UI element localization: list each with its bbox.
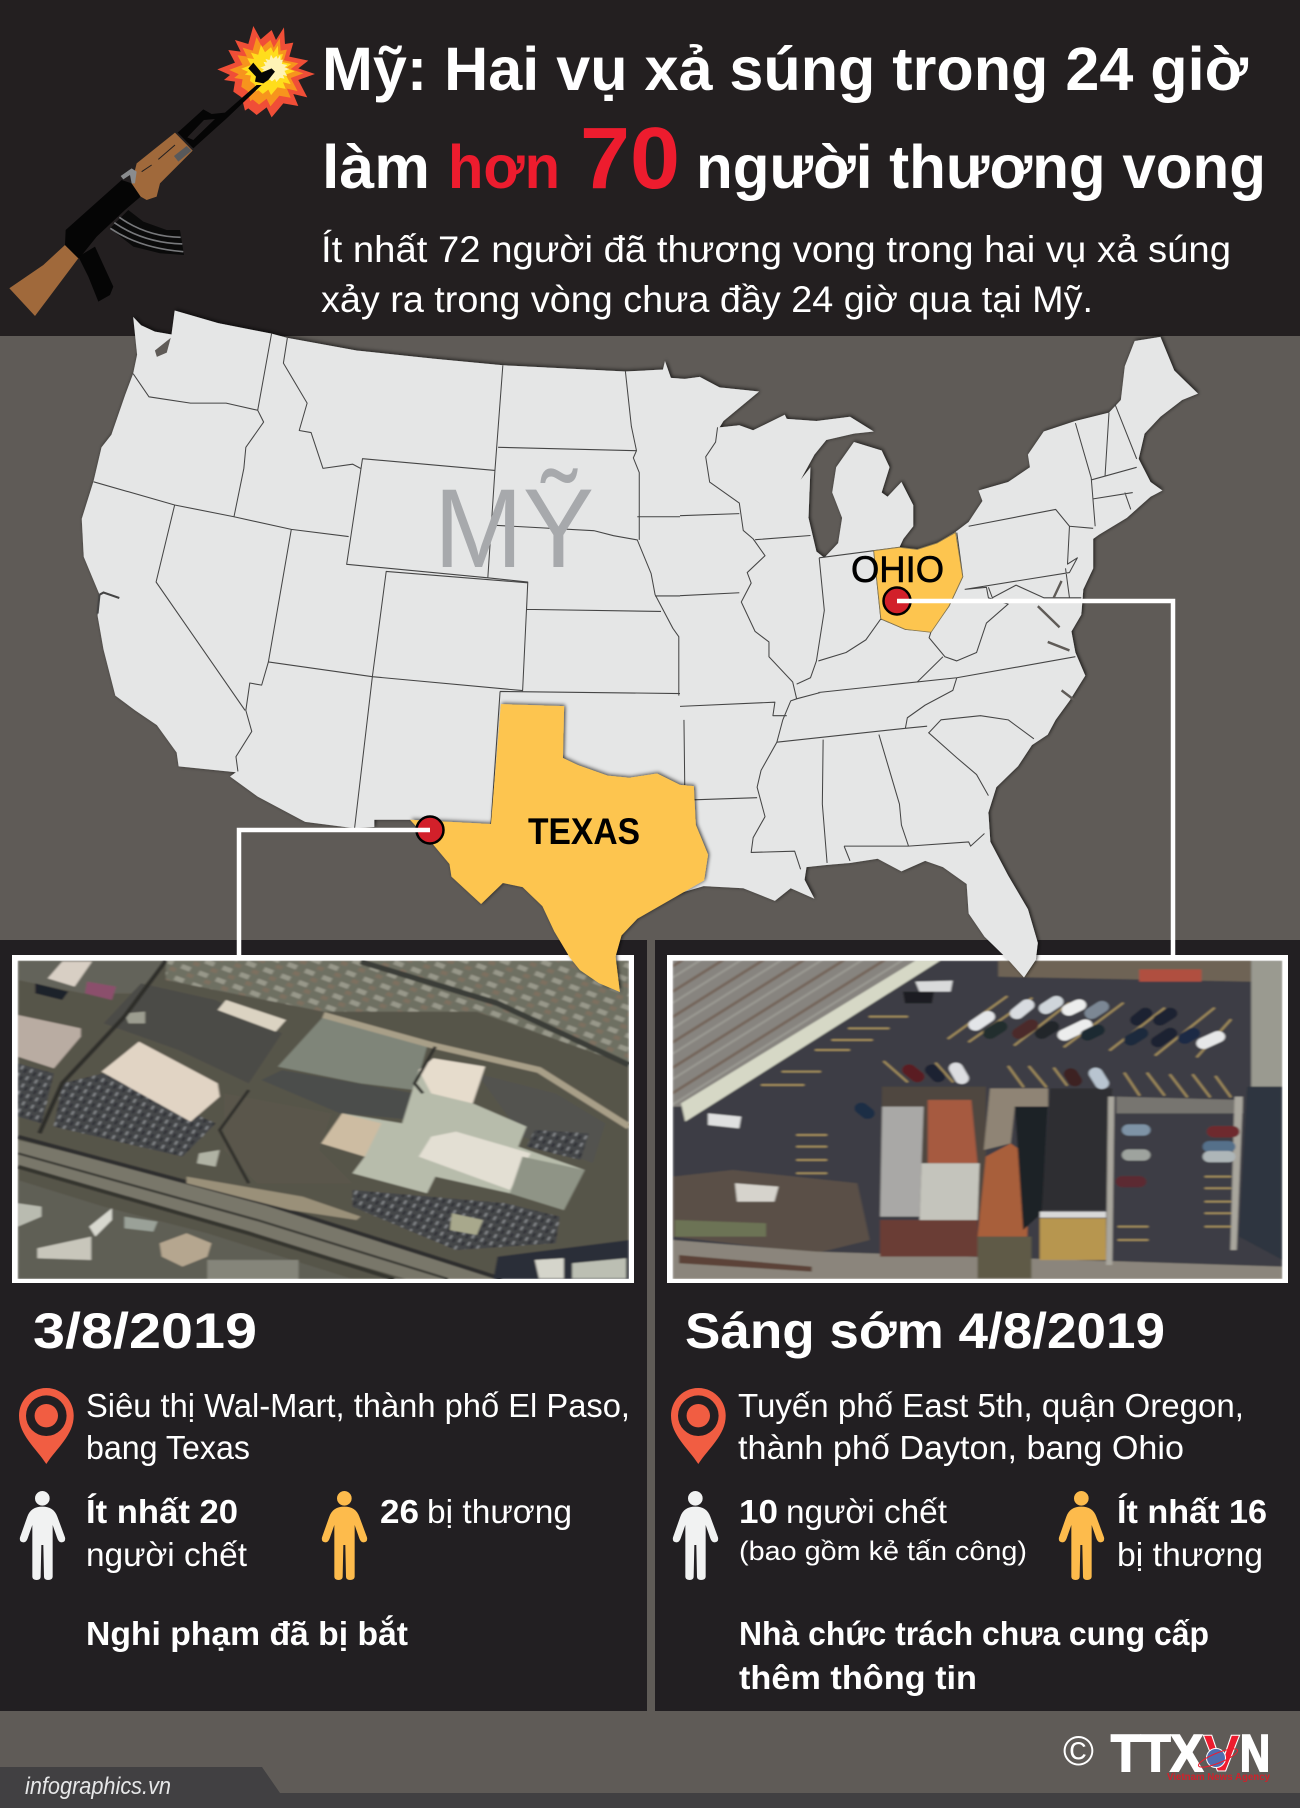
- logo: TTXVN: V: [1203, 1725, 1240, 1783]
- pistol grip: [78, 247, 113, 302]
- map label: MỸ: MỸ: [434, 466, 594, 591]
- logo: TTXVN: Vietnam News Agency: [1167, 1772, 1270, 1783]
- injured text: 26: [380, 1493, 419, 1530]
- location text: [86, 1387, 630, 1466]
- eastern state borders: [680, 404, 1137, 869]
- footer band: [0, 1711, 1300, 1808]
- title: [322, 35, 1266, 207]
- title line 2: 70: 70: [580, 110, 680, 207]
- subtitle: Ít nhất 72 người đã thương vong trong hai vụ xả súng: [321, 229, 1231, 270]
- source: infographics.vn: infographics.vn: [25, 1773, 171, 1800]
- injured text: [1117, 1493, 1267, 1573]
- barrel: [178, 63, 275, 148]
- deaths text: [86, 1493, 247, 1573]
- photo: El Paso Walmart aerial view: [12, 955, 634, 1283]
- marker: El Paso: [416, 816, 444, 844]
- icon: person dead: [673, 1491, 718, 1580]
- location text: bang Texas: [86, 1429, 250, 1466]
- icon: person dead: [20, 1491, 65, 1580]
- footer strip and tab: [0, 1767, 1300, 1808]
- connector line: Dayton to photo: [897, 601, 1173, 956]
- map label: TEXAS: TEXAS: [528, 811, 640, 852]
- deaths text: người chết: [786, 1493, 947, 1530]
- date: 3/8/2019: [33, 1303, 257, 1359]
- logo: TTXVN: [1111, 1725, 1270, 1783]
- location text: [738, 1387, 1244, 1466]
- injured text: bị thương: [1117, 1536, 1263, 1573]
- receiver: [65, 180, 141, 258]
- icon: location pin: [671, 1388, 726, 1464]
- state: Ohio highlighted: [874, 533, 963, 632]
- stock: [9, 245, 78, 316]
- map background: [0, 336, 1300, 940]
- injured text: bị thương: [427, 1493, 572, 1530]
- divider between panels: [647, 940, 655, 1711]
- deaths text: (bao gồm kẻ tấn công): [739, 1536, 1027, 1566]
- title line 2: người thương vong: người thương vong: [696, 133, 1266, 201]
- land silhouette with shadow: [82, 311, 1198, 977]
- deaths text: người chết: [86, 1536, 247, 1573]
- suspect note: Nghi phạm đã bị bắt: [86, 1615, 408, 1652]
- icon: rifle firing: [9, 26, 315, 316]
- magazine: [110, 210, 184, 255]
- deaths text: Ít nhất 20: [86, 1493, 238, 1530]
- right event details: [671, 1303, 1267, 1696]
- location text: Siêu thị Wal-Mart, thành phố El Paso,: [86, 1387, 630, 1424]
- authorities note: Nhà chức trách chưa cung cấp: [739, 1615, 1209, 1652]
- state: Texas highlighted: [410, 704, 708, 992]
- title line 2: hơn: hơn: [448, 133, 560, 201]
- icon: location pin: [19, 1388, 74, 1464]
- left event details: [19, 1303, 630, 1652]
- location text: Tuyến phố East 5th, quận Oregon,: [738, 1387, 1244, 1424]
- map label: OHIO: OHIO: [851, 549, 944, 590]
- panel: left event: [0, 940, 647, 1711]
- icon: person injured: [322, 1491, 367, 1580]
- header background: [0, 0, 1300, 336]
- western state borders: [94, 334, 680, 828]
- injured text: Ít nhất 16: [1117, 1493, 1267, 1530]
- deaths text: [739, 1493, 1027, 1566]
- title line 1: Mỹ: Hai vụ xả súng trong 24 giờ: [322, 35, 1249, 103]
- handguard: [121, 133, 193, 200]
- logo: TTXVN: TTX: [1111, 1725, 1203, 1783]
- subtitle: [321, 229, 1231, 320]
- location text: thành phố Dayton, bang Ohio: [738, 1429, 1184, 1466]
- deaths text: 10: [739, 1493, 778, 1530]
- subtitle: xảy ra trong vòng chưa đầy 24 giờ qua tại Mỹ.: [321, 279, 1093, 320]
- authorities note: [739, 1615, 1209, 1696]
- panel: right event: [655, 940, 1300, 1711]
- date: Sáng sớm 4/8/2019: [685, 1303, 1165, 1359]
- icon: person injured: [1059, 1491, 1104, 1580]
- muzzle flash: [217, 26, 315, 117]
- connector line: El Paso to photo: [239, 830, 430, 956]
- marker: Dayton: [884, 588, 910, 614]
- map: United States: [82, 311, 1198, 992]
- title line 2: làm: làm: [322, 133, 430, 201]
- photo: Dayton Oregon district aerial view: [667, 955, 1288, 1283]
- authorities note: thêm thông tin: [739, 1659, 977, 1696]
- logo: TTXVN: N: [1240, 1725, 1270, 1783]
- copyright symbol: ©: [1063, 1727, 1094, 1774]
